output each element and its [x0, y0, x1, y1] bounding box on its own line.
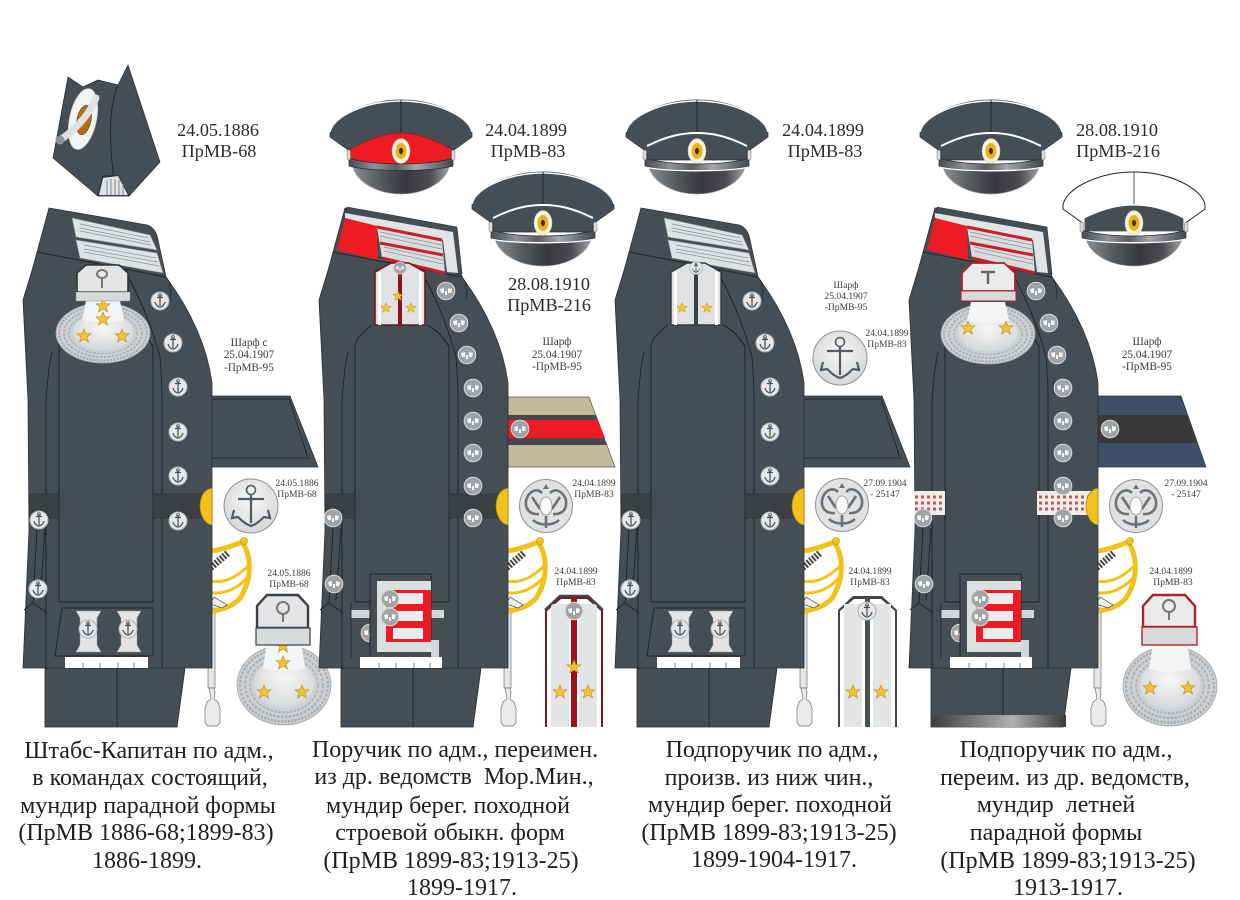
caption	[641, 737, 897, 873]
text: scarf note: Шарф	[542, 336, 572, 348]
text: board date: 24.04.1899	[848, 566, 892, 577]
icon: anchor button	[813, 331, 867, 385]
caption: (ПрМВ 1899-83;1913-25)	[940, 848, 1196, 874]
text: scarf note	[824, 280, 868, 313]
caption: парадной формы	[970, 820, 1142, 846]
icon: anchor button	[224, 479, 278, 533]
text: cap date: ПрМВ-216	[1076, 141, 1160, 161]
text: board date: ПрМВ-83	[556, 577, 596, 588]
jacket, collar, belt and tail	[909, 207, 1119, 727]
caption: 1899-1904-1917.	[691, 847, 857, 873]
belt	[29, 488, 212, 525]
caption: 1886-1899.	[92, 848, 202, 874]
text: cap date: 24.04.1899	[782, 120, 864, 140]
text: button date	[1164, 478, 1208, 500]
caption: Подпоручик по адм.,	[960, 737, 1172, 763]
sword	[501, 537, 546, 726]
caption: (ПрМВ 1899-83;1913-25)	[641, 820, 897, 846]
text: button date: ПрМВ-68	[277, 489, 317, 500]
epaulette on jacket	[56, 265, 150, 363]
icon: second cap	[472, 172, 614, 266]
text: board date: 24.04.1899	[554, 566, 598, 577]
text: cap date: 24.04.1899	[485, 120, 567, 140]
caption: мундир парадной формы	[20, 793, 276, 819]
text: scarf note: 25.04.1907	[224, 349, 275, 361]
text: cap date	[485, 120, 567, 161]
icon: epaulette	[237, 595, 331, 725]
text: scarf note: 25.04.1907	[824, 291, 868, 302]
caption: мундир берег. походной	[326, 793, 570, 819]
text: scarf note	[532, 336, 583, 373]
icon: bicorne hat	[53, 65, 160, 196]
caption	[312, 737, 598, 900]
icon: shoulder board	[838, 596, 897, 727]
sword	[1091, 537, 1136, 726]
coat tail	[55, 608, 153, 668]
text: anchor button date	[865, 328, 909, 350]
text: button date: ПрМВ-83	[574, 489, 614, 500]
collar	[72, 218, 163, 273]
text: board date	[848, 566, 892, 588]
scarf with red stripe	[508, 397, 615, 467]
text: epaulette date: 24.05.1886	[267, 568, 311, 579]
text: scarf note: 25.04.1907	[1122, 349, 1173, 361]
text: button date: 24.04.1899	[572, 478, 616, 489]
icon: epaulette	[1123, 595, 1217, 726]
text: scarf note: -ПрМВ-95	[532, 361, 582, 373]
text: epaulette date	[1149, 566, 1193, 588]
text: cap date: 28.08.1910	[1076, 120, 1158, 140]
text: second cap date	[507, 274, 591, 315]
text: second cap date: ПрМВ-216	[507, 295, 591, 315]
sword	[797, 537, 842, 726]
icon: white-top cap	[1063, 172, 1205, 266]
text: scarf note	[1122, 336, 1173, 373]
icon: cap	[626, 100, 768, 194]
jacket, collar, belt and tail	[319, 207, 529, 727]
icon: eagle button	[520, 480, 572, 532]
text: cap date: ПрМВ-83	[788, 141, 862, 161]
text: anchor button date: 24.04.1899	[865, 328, 909, 339]
text: scarf note: -ПрМВ-95	[825, 302, 868, 313]
caption: в командах состоящий,	[32, 765, 268, 791]
text: anchor button date: ПрМВ-83	[867, 339, 907, 350]
panel: figure 4 Podporuchik summer	[909, 100, 1217, 900]
panel: figure 2 Poruchik	[312, 100, 616, 900]
text: button date: 24.05.1886	[275, 478, 319, 489]
text: hat date: ПрМВ-68	[182, 141, 256, 161]
buttons	[29, 292, 187, 598]
caption: Поручик по адм., переимен.	[312, 737, 598, 763]
caption: Подпоручик по адм.,	[666, 737, 878, 763]
text: epaulette date: ПрМВ-83	[1153, 577, 1193, 588]
caption: Штабс-Капитан по адм.,	[24, 738, 274, 764]
text: button date	[572, 478, 616, 500]
text: scarf note: Шарф	[834, 280, 858, 291]
text: button date	[275, 478, 319, 500]
text: scarf note: -ПрМВ-95	[1122, 361, 1172, 373]
scarf with dark stripe	[1098, 396, 1206, 467]
panel: figure 1 Shtabs-Kapitan	[18, 65, 331, 874]
jacket, collar, belt and tail	[615, 208, 804, 727]
text: second cap date: 28.08.1910	[508, 274, 590, 294]
text: button date: 27.09.1904	[1164, 478, 1208, 489]
caption: мундир летней	[977, 792, 1135, 818]
caption	[18, 738, 276, 874]
text: eagle button date: 27.09.1904	[863, 478, 907, 489]
caption: произв. из ниж чин.,	[665, 765, 873, 791]
caption: мундир берег. походной	[648, 792, 892, 818]
icon: cap with red band	[330, 100, 472, 194]
scarf	[212, 396, 318, 467]
text: board date: ПрМВ-83	[850, 577, 890, 588]
text: scarf note: 25.04.1907	[532, 349, 583, 361]
text: cap date	[1076, 120, 1160, 161]
text: scarf note: Шарф с	[231, 337, 267, 349]
text: scarf note: Шарф	[1132, 336, 1162, 348]
caption: (ПрМВ 1886-68;1899-83)	[18, 820, 274, 846]
text: epaulette date: 24.04.1899	[1149, 566, 1193, 577]
caption	[940, 737, 1196, 900]
scarf	[804, 396, 910, 467]
icon: cap	[920, 100, 1062, 194]
caption: переим. из др. ведомств,	[940, 765, 1190, 791]
caption: из др. ведомств Мор.Мин.,	[314, 764, 594, 790]
icon: shoulder board	[545, 596, 603, 727]
sword	[205, 537, 250, 726]
caption: (ПрМВ 1899-83;1913-25)	[323, 848, 579, 874]
caption: строевой обыкн. форм	[335, 820, 565, 846]
text: eagle button date: - 25147	[870, 489, 900, 500]
text: cap date	[782, 120, 864, 161]
icon: eagle button	[816, 478, 868, 532]
panel: figure 3 Podporuchik	[615, 100, 910, 873]
text: hat date	[177, 120, 259, 161]
icon: eagle button	[1110, 480, 1162, 532]
text: eagle button date	[863, 478, 907, 500]
text: button date: - 25147	[1171, 489, 1201, 500]
text: epaulette date: ПрМВ-68	[269, 579, 309, 590]
text: hat date: 24.05.1886	[177, 120, 259, 140]
text: scarf note	[224, 337, 275, 374]
jacket	[23, 208, 212, 727]
text: epaulette date	[267, 568, 311, 590]
text: board date	[554, 566, 598, 588]
text: scarf note: -ПрМВ-95	[224, 362, 274, 374]
text: cap date: ПрМВ-83	[491, 141, 565, 161]
